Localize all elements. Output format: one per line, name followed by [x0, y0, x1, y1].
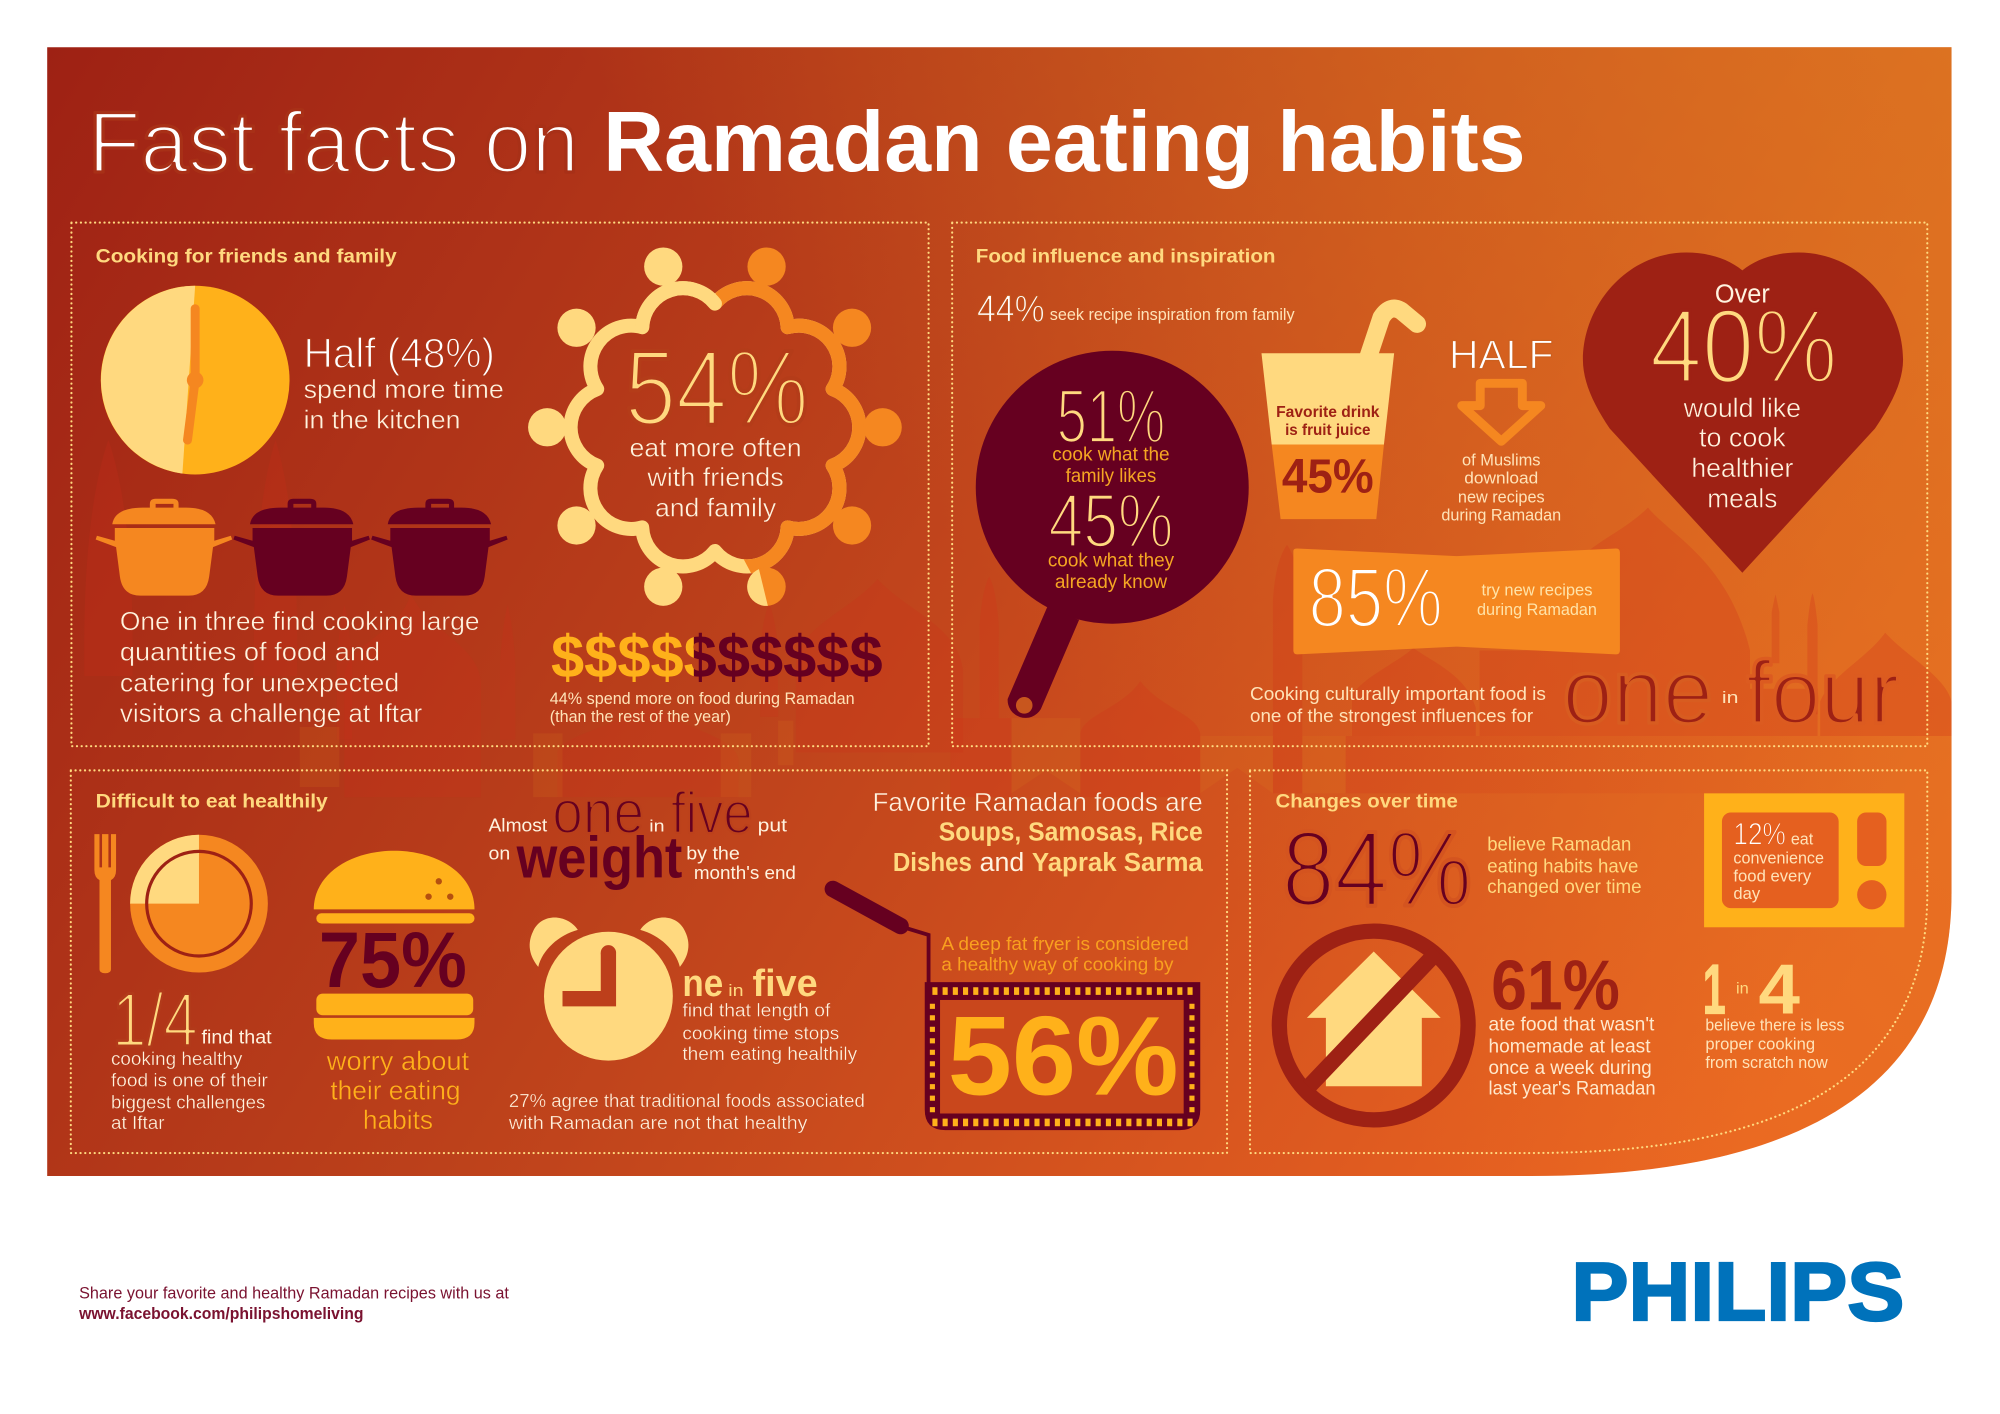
text: favorite ramadan foods: Soups, Samosas, Rice [939, 819, 1203, 847]
text: pan statistics: cook what the [1052, 444, 1170, 465]
icon: microwave: day [1733, 884, 1761, 903]
heading: food influence and inspiration: Food influence and inspiration [976, 246, 1276, 268]
text: one in four [1562, 641, 1899, 743]
title [88, 94, 1526, 191]
text: deep fat fryer considered: A deep fat fryer is considered [941, 933, 1189, 954]
text: of muslims download: new recipes [1458, 488, 1545, 507]
text: one in four believe: in [1736, 981, 1749, 998]
text: almost one in five put on weight: one [552, 778, 644, 846]
footer call to action [78, 1283, 509, 1323]
text: one quarter find: cooking healthy [111, 1048, 243, 1069]
text: pan statistics: 51% [1057, 375, 1165, 460]
icon: open book with 85 percent: 85% [1309, 550, 1443, 644]
text: one quarter find: find that [202, 1027, 272, 1048]
icon: open book with 85 percent: try new recipes [1482, 581, 1592, 600]
title: Ramadan eating habits [603, 95, 1526, 190]
text: almost one in five put on weight [489, 778, 796, 891]
icon: juice glass [1261, 309, 1417, 519]
text: almost one in five put on weight: put [758, 815, 787, 836]
text: half spend more time: spend more time [304, 374, 504, 404]
icon: dollar signs: $$$$$ [551, 623, 717, 690]
text: 84 percent believe: believe Ramadan [1487, 835, 1631, 856]
text: 44 percent spend more: 44% spend more on food during Ramadan [550, 689, 855, 708]
icon: deep fat fryer: 56% [948, 992, 1179, 1118]
text: favorite ramadan foods [872, 789, 1204, 877]
text: of muslims download [1441, 451, 1561, 524]
text: one quarter find [111, 978, 272, 1133]
icon: clock half [101, 286, 290, 474]
text: of muslims download: during Ramadan [1441, 505, 1561, 524]
text: pan statistics: already know [1055, 572, 1167, 593]
text: 44 percent spend more [550, 689, 855, 726]
text: 84 percent believe: eating habits have [1487, 856, 1638, 877]
text: one in four believe: proper cooking [1705, 1035, 1815, 1054]
text: almost one in five put on weight: on [489, 843, 510, 864]
text: one in three [120, 606, 480, 728]
text: 44 percent spend more: (than the rest of the year) [550, 707, 731, 726]
text: one in four believe: 1 [1703, 949, 1726, 1028]
text: favorite ramadan foods: Favorite Ramadan foods are [872, 789, 1203, 817]
icon: heart with 40 percent: to cook [1699, 422, 1786, 452]
text: deep fat fryer considered: a healthy way of cooking by [941, 954, 1174, 975]
text: deep fat fryer considered [941, 933, 1189, 975]
text: one in four believe: from scratch now [1705, 1053, 1829, 1072]
text: 61 percent ate food: ate food that wasn't [1489, 1014, 1655, 1036]
text: one in four believe [1703, 949, 1844, 1072]
text: culturally important food: Cooking culturally important food is [1250, 683, 1546, 704]
text: 54 percent: with friends [646, 462, 784, 492]
heading: cooking for friends and family: Cooking for friends and family [96, 246, 397, 268]
text: pan statistics: family likes [1066, 466, 1156, 487]
background panel [47, 47, 1952, 1176]
text: 54 percent: 54% [625, 328, 809, 448]
text: 27 percent agree: 27% agree that traditional foods associated [509, 1090, 865, 1111]
icon: heart with 40 percent: would like [1683, 393, 1801, 423]
text: half spend more time: in the kitchen [304, 405, 460, 435]
text: one quarter find: at Iftar [111, 1112, 165, 1133]
text: 61 percent ate food [1489, 946, 1656, 1099]
icon: heart with 40 percent: 40% [1650, 289, 1837, 406]
panel: changes over time [1250, 770, 1927, 1153]
icon: dollar signs: $$$$$$ [684, 623, 883, 690]
text: 27 percent agree [508, 1090, 865, 1133]
text: one in five cooking time: ne [682, 962, 723, 1005]
icon: deep fat fryer [833, 889, 1200, 1130]
text: almost one in five put on weight: Almost [489, 815, 547, 836]
icon: heart with 40 percent: meals [1707, 484, 1777, 514]
text: one in four: four [1746, 642, 1899, 742]
footer call to action: Share your favorite and healthy Ramadan recipes with us at [79, 1283, 509, 1302]
text: favorite ramadan foods: and [980, 849, 1024, 877]
text: of muslims download: download [1464, 468, 1538, 487]
logo: philips: PHILIPS [1571, 1245, 1904, 1338]
icon: orange pot [96, 499, 232, 596]
icon: open book with 85 percent [1293, 548, 1620, 654]
icon: open book with 85 percent: during Ramadan [1477, 600, 1597, 619]
text: almost one in five put on weight: weight [516, 826, 682, 891]
text: half spend more time: Half (48%) [304, 329, 495, 376]
text: 61 percent ate food: homemade at least [1489, 1035, 1651, 1057]
text: favorite ramadan foods: Dishes [893, 849, 972, 877]
text: one quarter find: 1/4 [112, 978, 198, 1063]
icon: down arrow [1462, 383, 1541, 441]
mosque skyline silhouette [84, 440, 1952, 797]
icon: heart with 40 percent [1583, 253, 1903, 573]
text: one in three: visitors a challenge at Iftar [120, 698, 422, 728]
icon: juice glass: is fruit juice [1285, 422, 1371, 439]
text: one in three: One in three find cooking large [120, 606, 480, 636]
text: 44 percent seek recipe: seek recipe inspiration from family [1050, 305, 1295, 324]
text: one in five cooking time: cooking time stops [682, 1023, 839, 1044]
text: pan statistics: cook what they [1048, 550, 1175, 571]
text: half spend more time [304, 329, 504, 435]
icon: dollar signs [552, 632, 882, 682]
text: one in five cooking time: them eating healthily [682, 1043, 858, 1064]
text: worry about [326, 1046, 470, 1135]
icon: alarm clock [530, 918, 688, 1061]
icon: microwave [1704, 793, 1904, 927]
text: one in four believe: believe there is less [1705, 1016, 1844, 1035]
text: 44 percent seek recipe [977, 287, 1295, 330]
text: one in five cooking time: find that length of [682, 1000, 831, 1021]
icon: heart with 40 percent: healthier [1691, 453, 1793, 483]
icon: dark pot [371, 499, 508, 596]
text: worry about: habits [363, 1105, 433, 1135]
heading: difficult to eat healthily: Difficult to eat healthily [96, 790, 328, 812]
text: 84 percent believe: 84% [1282, 809, 1472, 929]
text: almost one in five put on weight: in [649, 817, 665, 836]
text: 54 percent: eat more often [629, 433, 802, 463]
icon: no home [1279, 931, 1468, 1120]
icon: microwave: convenience [1733, 849, 1824, 868]
icon: frying pan [976, 351, 1249, 718]
text: 61 percent ate food: once a week during [1489, 1057, 1652, 1079]
text: one in five cooking time [682, 962, 858, 1064]
text: one in four believe: 4 [1759, 949, 1800, 1028]
icon: microwave: eat [1791, 829, 1814, 848]
text: 84 percent believe [1282, 809, 1642, 929]
text: almost one in five put on weight: five [671, 781, 753, 846]
panel: difficult to eat healthily [71, 770, 1227, 1153]
text: one in four: one [1562, 641, 1713, 743]
text: almost one in five put on weight: month's end [694, 862, 796, 883]
text: one in four: in [1722, 688, 1739, 707]
text: one quarter find: biggest challenges [111, 1091, 265, 1112]
text: worry about: their eating [330, 1075, 460, 1105]
text: 54 percent: and family [655, 493, 777, 523]
text: 54 percent [625, 328, 809, 523]
text: pan statistics [1048, 375, 1175, 593]
icon: microwave: 12% [1733, 815, 1786, 851]
text: 84 percent believe: changed over time [1487, 877, 1642, 898]
icon: dark pot [233, 499, 370, 596]
panel: cooking for friends and family [71, 223, 929, 746]
text: culturally important food [1250, 683, 1546, 726]
icon: table ring with people [528, 247, 902, 606]
text: 61 percent ate food: last year's Ramadan [1489, 1077, 1656, 1099]
icon: burger: 75% [319, 915, 467, 1004]
icon: juice glass: Favorite drink [1276, 404, 1380, 421]
text: one in three: quantities of food and [120, 637, 380, 667]
icon: fork [94, 834, 116, 973]
icon: plate [130, 835, 268, 973]
text: one in three: catering for unexpected [120, 667, 399, 697]
text: culturally important food: one of the strongest influences for [1250, 705, 1533, 726]
text: one in five cooking time: five [753, 962, 818, 1005]
text: one in five cooking time: in [728, 981, 744, 1000]
text: favorite ramadan foods: Yaprak Sarma [1032, 849, 1204, 877]
icon: burger [314, 851, 474, 1040]
text: of muslims download: of Muslims [1462, 451, 1540, 470]
text: half heading: HALF [1449, 332, 1554, 378]
text: one quarter find: food is one of their [111, 1070, 268, 1091]
footer call to action: www.facebook.com/philipshomeliving [78, 1304, 364, 1323]
text: worry about: worry about [326, 1046, 470, 1076]
heading: changes over time: Changes over time [1276, 790, 1458, 812]
panel: food influence and inspiration [952, 223, 1927, 746]
text: pan statistics: 45% [1048, 479, 1173, 564]
icon: juice glass: 45% [1282, 449, 1374, 503]
icon: heart with 40 percent: Over [1715, 280, 1770, 308]
text: almost one in five put on weight: by the [686, 843, 740, 864]
text: 27 percent agree: with Ramadan are not that healthy [508, 1112, 808, 1133]
icon: microwave: food every [1733, 866, 1812, 885]
title: Fast facts on [88, 94, 579, 191]
text: 61 percent ate food: 61% [1491, 946, 1620, 1025]
text: 44 percent seek recipe: 44% [977, 287, 1045, 330]
